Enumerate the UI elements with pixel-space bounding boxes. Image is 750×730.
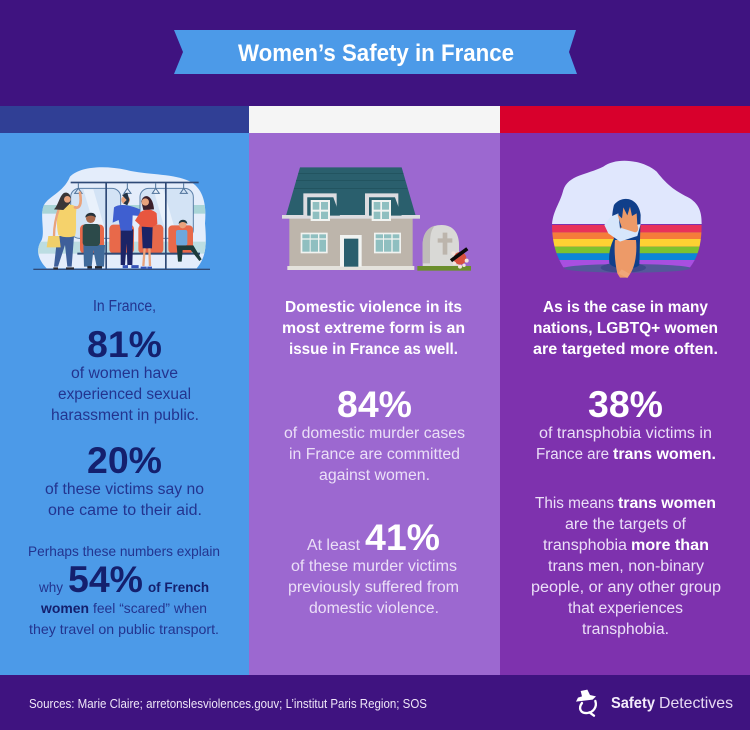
text: 20% description: of these victims say no (45, 481, 204, 498)
heading: domestic violence: issue in France as well. (289, 341, 458, 358)
footer (0, 675, 750, 730)
text: transphobia paragraph: This means (535, 495, 614, 512)
text: 81% description: harassment in public. (51, 407, 199, 424)
heading: domestic violence: most extreme form is an (282, 320, 465, 337)
icon: detective hat and magnifier (576, 690, 596, 716)
panel: LGBTQ+ women (500, 133, 750, 675)
text: 20% description (45, 481, 204, 519)
text: 38% description: France are (536, 446, 609, 463)
text: transphobia paragraph: transphobia. (582, 621, 669, 638)
text: transphobia paragraph: that experiences (568, 600, 683, 617)
text: 54% paragraph: Perhaps these numbers explain (28, 543, 220, 559)
text: 81% description (51, 365, 199, 424)
title banner (174, 30, 577, 74)
icon: house and gravestone (282, 167, 471, 271)
text: transphobia paragraph: trans women (618, 495, 716, 512)
icon: subway passengers (30, 167, 217, 270)
text: 54% paragraph: feel “scared” when (93, 600, 207, 616)
logo: SafetyDetectives (576, 690, 733, 716)
text: 54% paragraph: women (40, 600, 89, 616)
stat: at least 41%: At least (307, 537, 361, 554)
text: transphobia paragraph: are the targets of (565, 516, 687, 533)
stat: at least 41%: 41% (365, 516, 440, 558)
stat: at least 41% (307, 516, 440, 558)
text: 41% description: previously suffered from (288, 579, 459, 596)
header band (0, 0, 750, 106)
text: transphobia paragraph (531, 495, 721, 638)
heading: LGBTQ+: As is the case in many (543, 299, 708, 316)
text: transphobia paragraph: transphobia (543, 537, 627, 554)
stat: 84%: 84% (337, 383, 412, 425)
text: 38% description (536, 425, 716, 463)
text: transphobia paragraph: more than (631, 537, 709, 554)
text: 84% description: of domestic murder cases (284, 425, 465, 442)
sources: Sources: Marie Claire; arretonslesviolences.gouv; L’institut Paris Region; SOS (29, 696, 427, 711)
text: 38% description: trans women. (613, 446, 716, 463)
heading: LGBTQ+: nations, LGBTQ+ women (533, 320, 718, 337)
text: 84% description: against women. (319, 467, 430, 484)
French flag stripes (0, 106, 750, 133)
text: 54% paragraph: 54% (68, 558, 143, 600)
panel: domestic violence (249, 133, 500, 675)
logo: SafetyDetectives: Detectives (659, 695, 733, 712)
text: 54% paragraph (28, 543, 220, 637)
intro text: In France, (93, 298, 156, 315)
heading: LGBTQ+ (533, 299, 718, 358)
text: 54% paragraph: they travel on public transport. (29, 621, 219, 637)
text: 84% description (284, 425, 465, 484)
stat: 81%: 81% (87, 323, 162, 365)
text: 81% description: of women have (71, 365, 178, 382)
text: transphobia paragraph: trans men, non-binary (548, 558, 704, 575)
text: 54% paragraph: of French (148, 579, 209, 595)
heading: domestic violence: Domestic violence in its (285, 299, 462, 316)
text: transphobia paragraph: people, or any other group (531, 579, 721, 596)
text: 54% paragraph: why (38, 579, 63, 595)
heading: LGBTQ+: are targeted more often. (533, 341, 718, 358)
text: 41% description: domestic violence. (309, 600, 439, 617)
panel: public harassment (0, 133, 249, 675)
stat: 20%: 20% (87, 439, 162, 481)
stat: 38%: 38% (588, 383, 663, 425)
title: Women’s Safety in France (238, 40, 514, 67)
banner ribbon (174, 30, 577, 74)
text: 41% description (288, 558, 459, 617)
text: 20% description: one came to their aid. (48, 502, 202, 519)
wordmark: Safety (611, 695, 655, 712)
icon: woman on rainbow (552, 160, 702, 278)
text: 41% description: of these murder victims (291, 558, 457, 575)
text: 84% description: in France are committed (289, 446, 460, 463)
heading: domestic violence (282, 299, 465, 358)
text: 81% description: experienced sexual (58, 386, 191, 403)
text: 38% description: of transphobia victims in (539, 425, 712, 442)
